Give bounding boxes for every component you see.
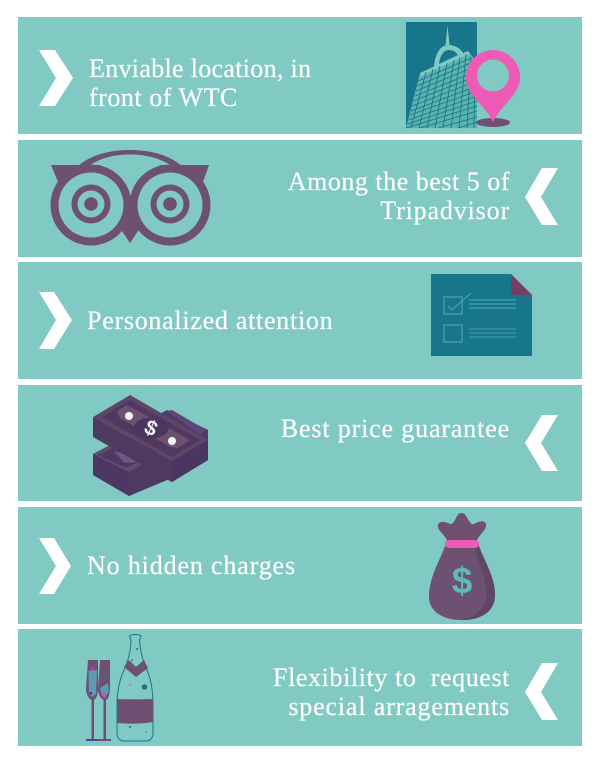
text: no hidden charges: No hidden charges bbox=[87, 551, 296, 580]
text: flexibility bbox=[273, 663, 510, 721]
text: location: front of WTC bbox=[89, 83, 238, 112]
arrow: row 1 bbox=[39, 50, 73, 106]
text: tripadvisor bbox=[288, 167, 510, 225]
arrow: row 6 bbox=[525, 663, 558, 720]
arrow: row 4 bbox=[525, 415, 558, 471]
arrow: row 3 bbox=[39, 292, 72, 349]
text: location: Enviable location, in bbox=[89, 54, 311, 83]
icon: money bag bbox=[429, 513, 495, 620]
panel: best price bbox=[18, 385, 582, 501]
panel: no hidden charges bbox=[18, 507, 582, 624]
icon: tripadvisor owl bbox=[50, 150, 210, 246]
text: flexibility: Flexibility to request bbox=[273, 663, 510, 692]
arrow: row 2 bbox=[525, 168, 558, 225]
panel: personalized attention bbox=[18, 262, 582, 379]
icon: money bag: $ bbox=[452, 560, 473, 601]
text: tripadvisor: Tripadvisor bbox=[380, 196, 510, 225]
text: location bbox=[89, 54, 311, 112]
arrow: row 5 bbox=[39, 538, 71, 594]
text: best price: Best price guarantee bbox=[281, 414, 510, 443]
icon: stacks of money: $ bbox=[141, 416, 161, 441]
icon: champagne bottle and glasses bbox=[86, 634, 153, 741]
icon: stacks of money bbox=[93, 395, 208, 496]
panel: flexibility bbox=[18, 629, 582, 746]
icon: building and map pin bbox=[406, 22, 520, 128]
text: flexibility: special arragements bbox=[288, 692, 510, 721]
text: personalized attention: Personalized attention bbox=[87, 306, 333, 335]
panel: tripadvisor bbox=[18, 140, 582, 257]
panel: location bbox=[18, 17, 582, 134]
icon: checklist document bbox=[431, 274, 532, 356]
text: tripadvisor: Among the best 5 of bbox=[288, 167, 510, 196]
